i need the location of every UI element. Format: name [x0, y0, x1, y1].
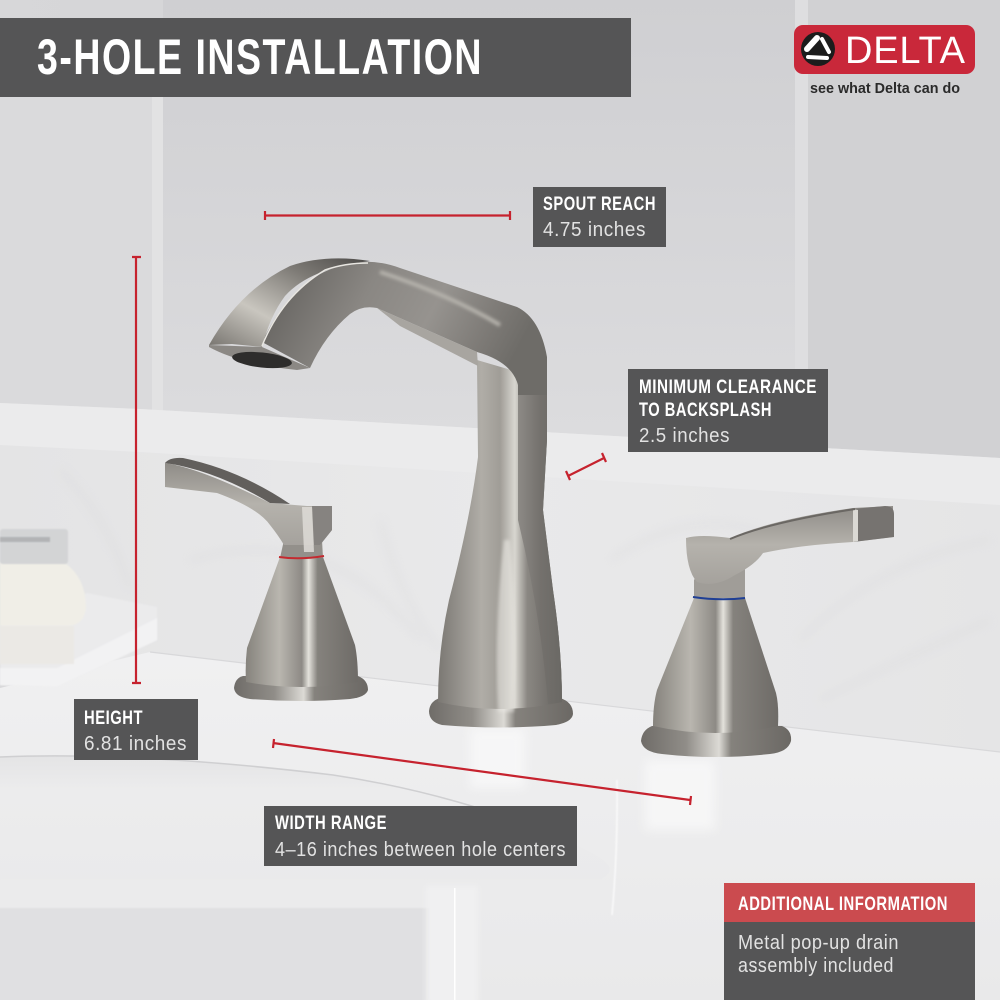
faucet: left handle (hot)	[165, 458, 368, 701]
Delta logo: DELTA	[845, 30, 966, 72]
callout header	[724, 883, 975, 922]
left handle neck	[280, 540, 323, 558]
label: minimum clearance to backsplash	[628, 369, 828, 452]
marble backsplash	[0, 403, 1000, 760]
dimension line: height	[132, 257, 141, 683]
label: minimum clearance to backsplash: MINIMUM CLEARANCE	[639, 376, 817, 398]
label: height	[74, 699, 198, 760]
undermount sink basin	[0, 756, 620, 1000]
label: spout reach: SPOUT REACH	[543, 193, 656, 215]
cold indicator	[693, 597, 745, 599]
aerator	[231, 349, 293, 371]
title banner: 3-HOLE INSTALLATION	[37, 29, 483, 85]
right handle base	[641, 726, 791, 757]
label: width range	[264, 806, 577, 866]
callout: additional information	[724, 883, 975, 1000]
spout arch	[262, 262, 547, 395]
spout hood	[209, 258, 370, 347]
logo mark	[801, 32, 835, 66]
right handle cone	[653, 598, 778, 733]
right handle neck	[694, 565, 745, 598]
spout stem	[438, 360, 562, 709]
Delta logo	[794, 25, 975, 97]
soap dish and jar	[0, 529, 157, 687]
callout body	[724, 922, 975, 1000]
hot indicator	[279, 556, 324, 558]
faucet: centre spout	[209, 258, 573, 728]
left handle cone	[246, 557, 358, 687]
label: minimum clearance to backsplash: TO BACKSPLASH	[639, 399, 772, 421]
callout body: Metal pop-up drain	[738, 932, 899, 954]
callout body: assembly included	[738, 955, 894, 977]
vanity countertop	[0, 652, 1000, 1000]
left handle lever	[165, 463, 332, 545]
label: spout reach: 4.75 inches	[543, 219, 646, 241]
spout base	[429, 698, 573, 728]
dimension line: minimum clearance	[566, 453, 606, 480]
label: height: 6.81 inches	[84, 733, 187, 755]
label: width range: WIDTH RANGE	[275, 812, 387, 834]
label: minimum clearance to backsplash: 2.5 inches	[639, 425, 730, 447]
label: spout reach	[533, 187, 666, 247]
left handle base	[234, 676, 368, 701]
dimension line: width range	[273, 739, 691, 805]
Delta logo: see what Delta can do	[810, 80, 960, 97]
title banner	[0, 18, 631, 97]
faucet: right handle (cold)	[641, 506, 894, 757]
right handle lever	[686, 506, 893, 584]
bathroom wall background	[0, 0, 1000, 470]
label: width range: 4–16 inches between hole centers	[275, 839, 566, 861]
label: height: HEIGHT	[84, 707, 143, 729]
dimension line: spout reach	[265, 211, 510, 220]
